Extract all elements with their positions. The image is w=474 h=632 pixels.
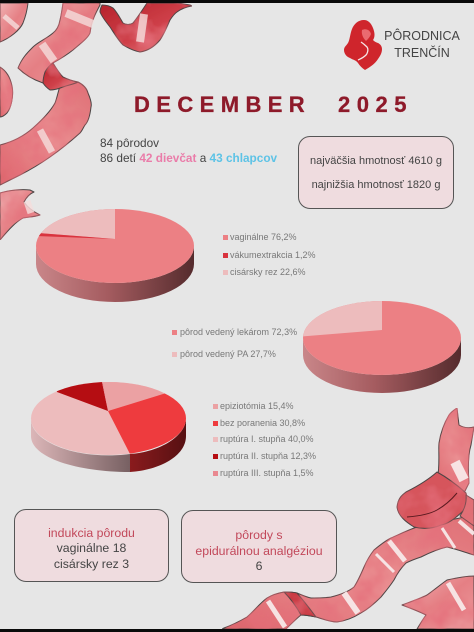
legend: delivery method bbox=[223, 232, 316, 277]
pie top bbox=[303, 301, 461, 375]
summary text: 84 pôrodov bbox=[100, 136, 159, 150]
slice: ruptúra III bbox=[102, 382, 108, 408]
side wall dark bbox=[130, 418, 186, 472]
slice: cisársky rez bbox=[41, 209, 115, 239]
slice: pôrod vedený PA bbox=[303, 301, 382, 336]
ribbon corner piece bbox=[0, 3, 28, 42]
slice: bez poranenia bbox=[108, 394, 186, 454]
ribbon blob fold bbox=[397, 472, 467, 528]
title: 2025 bbox=[338, 92, 413, 117]
panel: labor induction bbox=[14, 509, 169, 582]
pie chart: birth attendant bbox=[296, 298, 461, 393]
heaviest weight: najväčšia hmotnosť 4610 g bbox=[310, 155, 442, 167]
legend item cisársky rez: cisársky rez 22,6% bbox=[230, 267, 306, 277]
legend: injuries bbox=[213, 401, 316, 478]
title: DECEMBER bbox=[134, 92, 311, 117]
slice: vákuumextrakcia bbox=[36, 233, 115, 239]
ribbon highlights bottom-right bbox=[268, 462, 474, 627]
legend item ruptúra III: ruptúra III. stupňa 1,5% bbox=[220, 468, 314, 478]
ribbon left fragment bbox=[0, 67, 13, 117]
pie top bbox=[36, 209, 194, 283]
panel: labor induction: cisársky rez 3 bbox=[54, 556, 129, 570]
ribbon fold right bbox=[460, 495, 474, 526]
pie side wall bbox=[303, 338, 461, 393]
ribbon upper strand bbox=[18, 3, 100, 83]
panel: epidural births bbox=[181, 510, 337, 583]
legend item vaginálne: vaginálne 76,2% bbox=[230, 232, 297, 242]
title bbox=[134, 92, 413, 117]
legend item ruptúra II: ruptúra II. stupňa 12,3% bbox=[220, 451, 316, 461]
ribbon highlights top-left bbox=[4, 13, 144, 213]
pie top bbox=[31, 382, 186, 455]
legend item bez poranenia: bez poranenia 30,8% bbox=[220, 418, 305, 428]
pie chart: delivery method bbox=[30, 205, 194, 302]
panel: labor induction: indukcia pôrodu bbox=[48, 526, 135, 540]
pie chart: injuries bbox=[31, 382, 186, 472]
ribbon upper strand bbox=[435, 408, 474, 495]
summary text bbox=[100, 136, 277, 165]
logo icon: mother and child heart bbox=[344, 20, 382, 70]
summary text: 86 detí 42 dievčat a 43 chlapcov bbox=[100, 151, 277, 165]
legend item PA: pôrod vedený PA 27,7% bbox=[180, 349, 276, 359]
logo text: TRENČÍN bbox=[394, 46, 450, 60]
ribbon: top-left decoration bbox=[0, 3, 192, 240]
logo text: PÔRODNICA bbox=[384, 29, 460, 43]
ribbon fold line bbox=[407, 493, 457, 517]
legend item epiziotómia: epiziotómia 15,4% bbox=[220, 401, 294, 411]
panel: epidural births: 6 bbox=[256, 559, 262, 573]
slice: ruptúra II bbox=[56, 382, 108, 411]
logo text bbox=[384, 28, 460, 60]
ribbon: bottom-right decoration bbox=[222, 408, 474, 629]
legend item vákuumextrakcia: vákumextrakcia 1,2% bbox=[230, 250, 316, 260]
ribbon main strand bbox=[222, 515, 474, 629]
ribbon twist fold bbox=[284, 592, 316, 617]
panel: epidural births: pôrody s bbox=[235, 528, 283, 542]
legend item ruptúra I: ruptúra I. stupňa 40,0% bbox=[220, 434, 314, 444]
slice: epiziotómia bbox=[103, 382, 164, 411]
panel: epidural births: epidurálnou analgéziou bbox=[195, 544, 323, 558]
panel: labor induction: vaginálne 18 bbox=[57, 541, 126, 555]
lowest weight: najnižšia hmotnosť 1820 g bbox=[312, 179, 440, 191]
legend item lekár: pôrod vedený lekárom 72,3% bbox=[180, 327, 297, 337]
top black bar bbox=[0, 0, 474, 3]
side wall light bbox=[31, 418, 130, 472]
ribbon tail left bbox=[0, 190, 40, 240]
bottom black bar bbox=[0, 629, 474, 632]
ribbon lower tail bbox=[402, 576, 474, 629]
ribbon top curl bbox=[100, 3, 192, 52]
panel: birth weight bbox=[298, 136, 454, 209]
ribbon lower strand bbox=[0, 82, 91, 185]
ribbon twist bbox=[43, 63, 78, 90]
pie side wall bbox=[36, 246, 194, 302]
legend: birth attendant bbox=[172, 327, 297, 359]
